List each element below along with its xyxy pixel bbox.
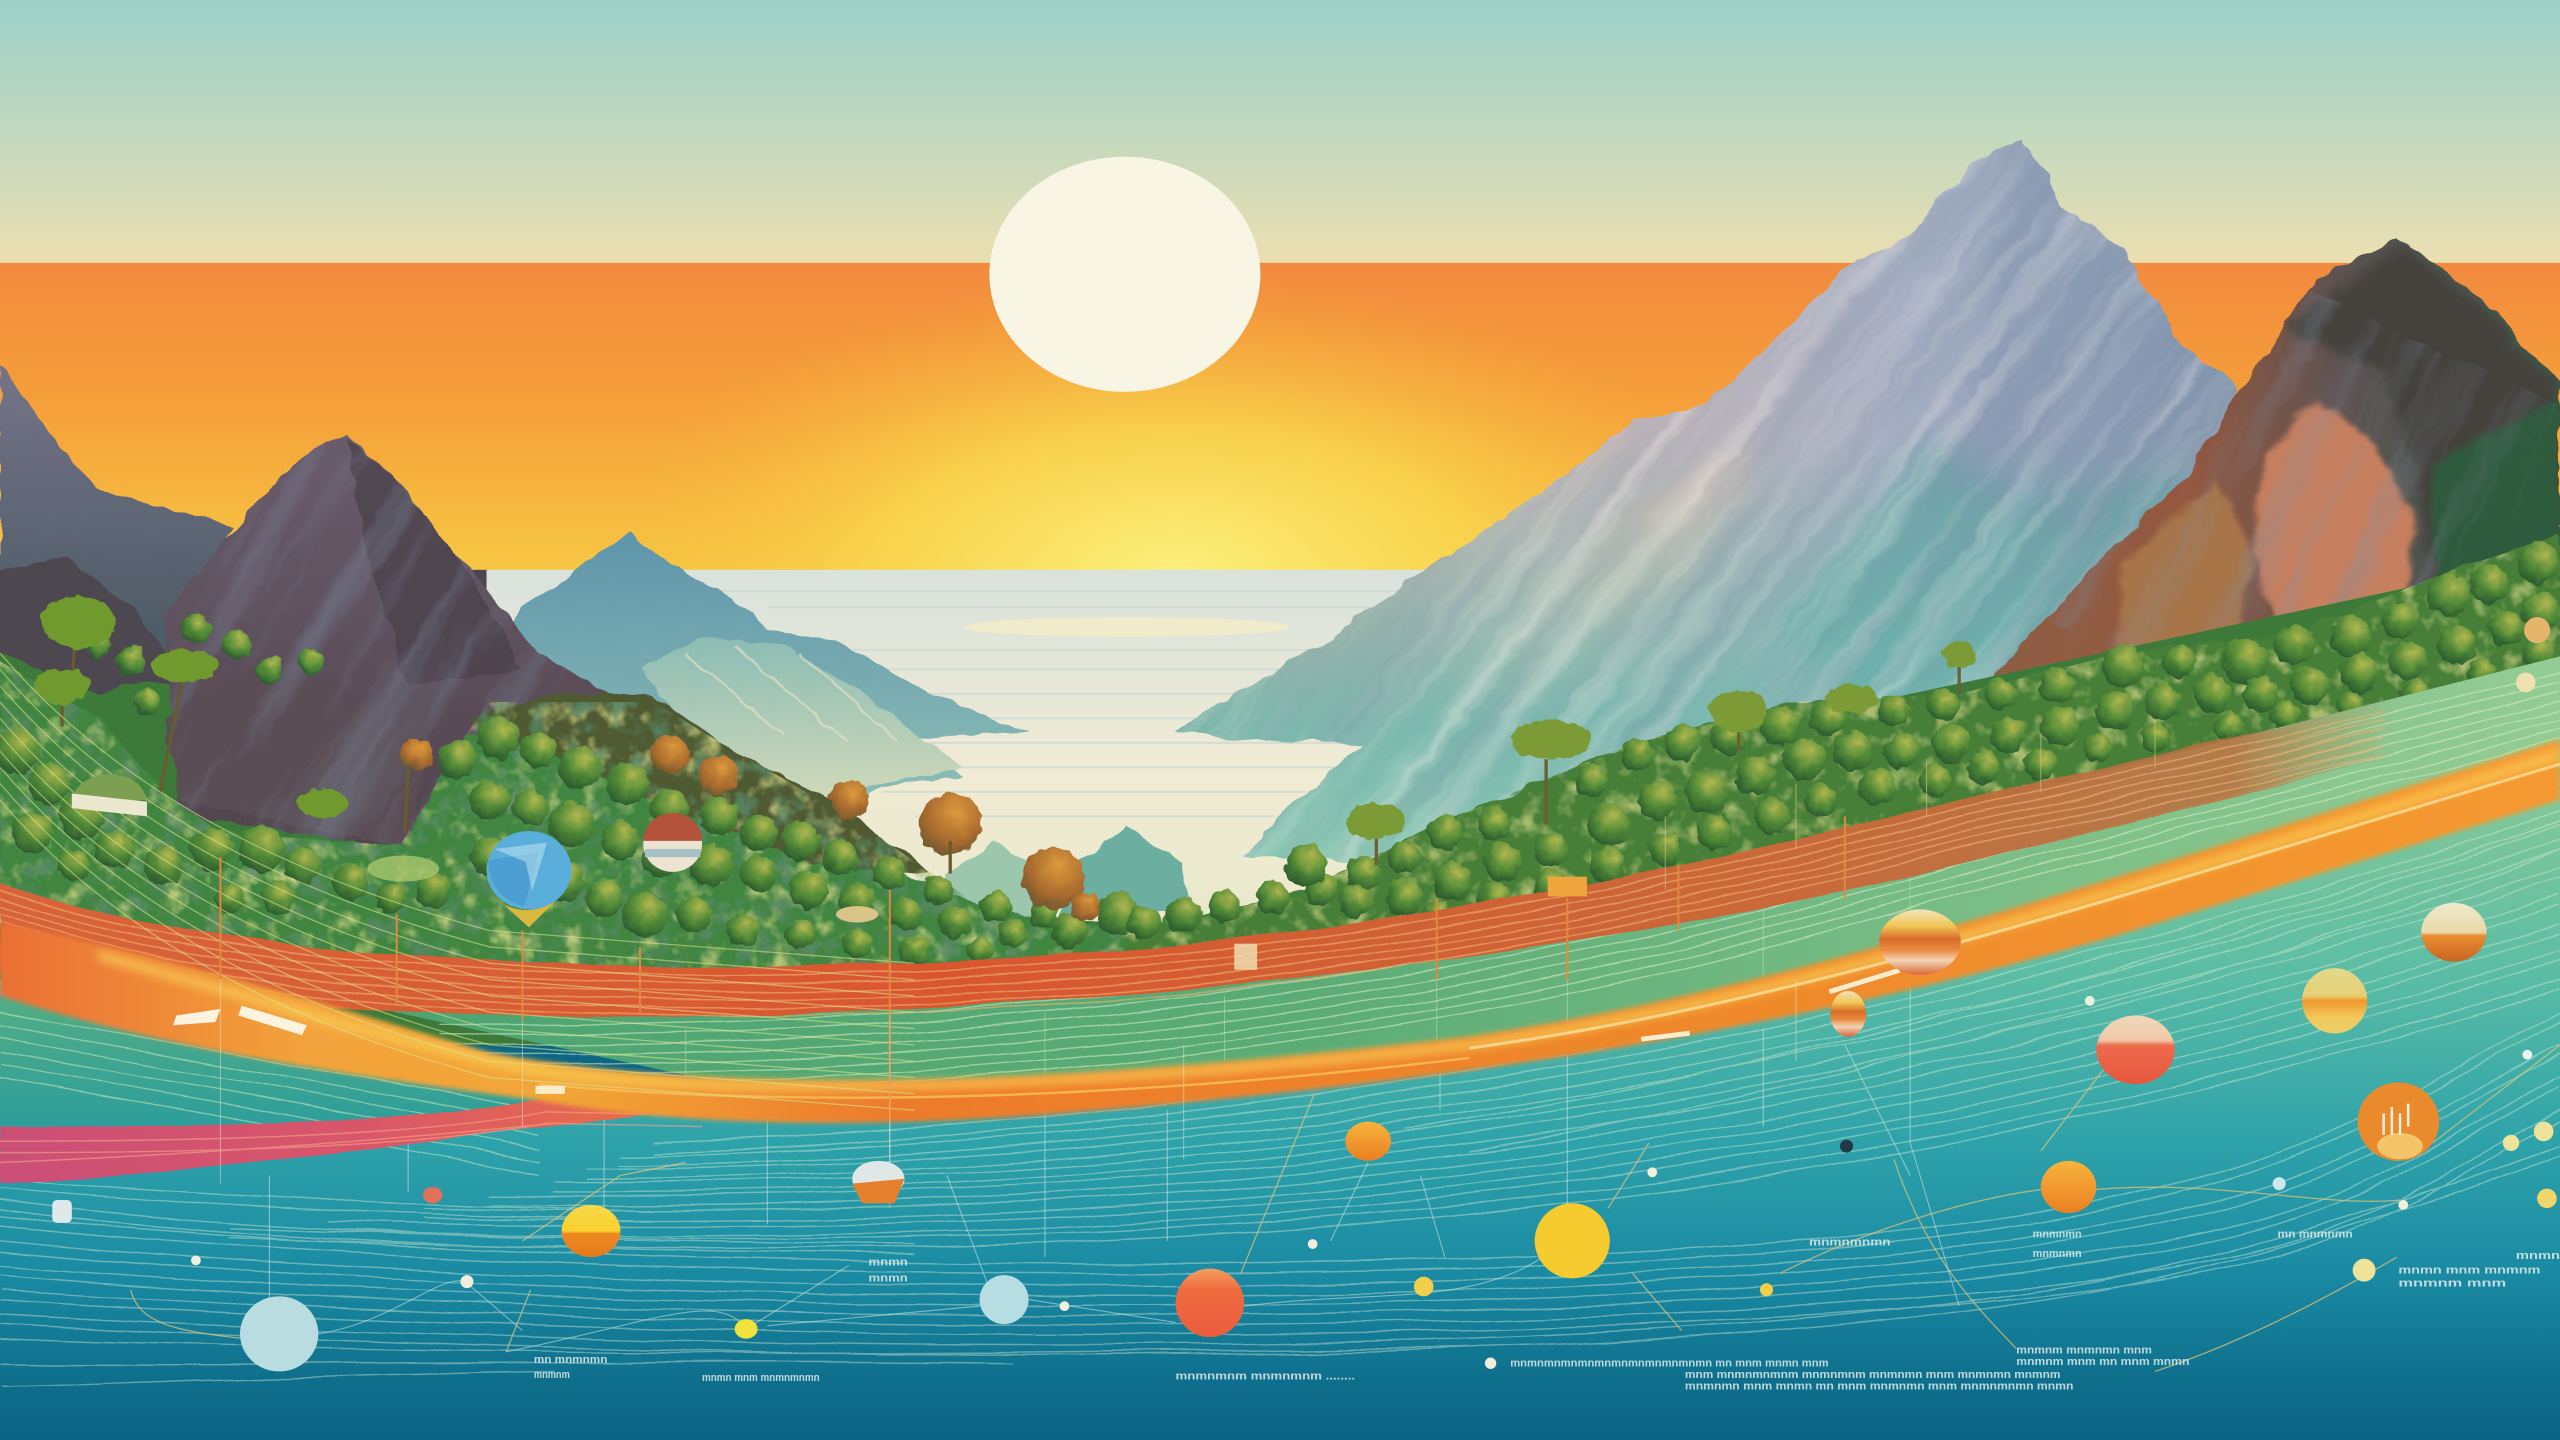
marker: striped orange sphere [1879, 909, 1961, 975]
caption right row one: mnmn mnm mnmnm [2398, 1264, 2540, 1276]
caption upper row one: mnmnm mnmnmn mnm [2016, 1344, 2152, 1356]
caption lower left second line: mnmnm [534, 1369, 570, 1381]
marker: yellow and orange sphere [2302, 968, 2367, 1033]
red orange band [0, 699, 2400, 1018]
marker: large yellow sphere [1535, 1203, 1610, 1278]
hillside mesh lines and poles [0, 653, 2155, 1208]
marker: coral sphere [1176, 1269, 1244, 1337]
caption mid right second: mnmnmn [2033, 1248, 2082, 1260]
water gradient base with contour lines [0, 740, 2560, 1440]
forest texture [0, 536, 2560, 1009]
right hillside vegetation [1126, 534, 2560, 950]
caption center stacked second: mnmn [869, 1273, 908, 1285]
green contour band [245, 656, 2560, 1094]
caption right row two: mnmnm mnm [2398, 1278, 2506, 1290]
marker: small orange sphere [1345, 1122, 1391, 1161]
orange horizon band [0, 263, 2560, 573]
caption mid right: mnmnmn [2033, 1229, 2082, 1241]
marker: red and white sphere [643, 813, 702, 872]
marker: blue sphere [487, 831, 571, 927]
caption row two: mnm mnmnmnmnm mnmnmnm mnmnmn mnm mnmnmn mnmnm [1685, 1369, 2060, 1381]
marker: pale blue sphere [980, 1275, 1029, 1324]
caption bottom center: mnmnmnm mnmnmnm ........ [1176, 1371, 1355, 1383]
caption right mid: mn mnmnmn [2278, 1229, 2353, 1241]
marker: cream dome [72, 774, 147, 816]
caption mid: mnmnmnmn [1809, 1237, 1891, 1249]
sea [0, 570, 2560, 978]
marker: large pale blue sphere [240, 1296, 318, 1371]
caption bottom center left: mnmn mnm mnmnmnmn [702, 1372, 820, 1384]
marker: yellow and orange sphere left [562, 1205, 620, 1257]
caption row one: mnmnmnmnmnmnmnmnmnmnmnmn mn mnm mnmn mnm [1510, 1358, 1829, 1370]
marker: coral sphere with cream top [2096, 1016, 2175, 1084]
marker: striped small capsule [1830, 991, 1866, 1037]
small white and yellow node dots [52, 996, 2557, 1369]
bright orange band [0, 740, 2560, 1123]
far right rocky mountain [1994, 238, 2560, 676]
sun [989, 157, 1260, 392]
marker: cream and orange sphere [2421, 903, 2487, 962]
caption right top: mnmn [2516, 1250, 2560, 1262]
far mountains in the bay [473, 534, 1192, 914]
far left mountain [0, 367, 232, 661]
caption upper row two: mnmnm mnm mn mnm mnmn [2016, 1356, 2189, 1368]
caption lower left: mn mnmnmn [534, 1354, 607, 1366]
caption center stacked: mnmn [869, 1256, 908, 1268]
sky gradient [0, 0, 2560, 264]
central left mountain [0, 434, 608, 845]
data markers on the hills and bands [52, 617, 2557, 1371]
land base behind the foreground [0, 555, 2560, 1045]
big right mountain [1174, 140, 2238, 863]
caption row three: mnmnmn mnm mnmn mn mnm mnmnmn mnm mnmnmnmn mnmn [1685, 1380, 2074, 1392]
pink band [0, 1097, 718, 1184]
marker: large orange sphere [2358, 1082, 2439, 1161]
marker: orange sphere right [2041, 1161, 2096, 1213]
forest texture right [1126, 550, 2560, 949]
illegible small captions [534, 1229, 2560, 1392]
teal contour area at left [0, 996, 555, 1176]
left hillside vegetation [0, 536, 2560, 1009]
marker: small hill signs [367, 617, 2550, 970]
marker: small yellow dot [735, 1319, 758, 1339]
marker: white and orange sphere [852, 1161, 904, 1203]
